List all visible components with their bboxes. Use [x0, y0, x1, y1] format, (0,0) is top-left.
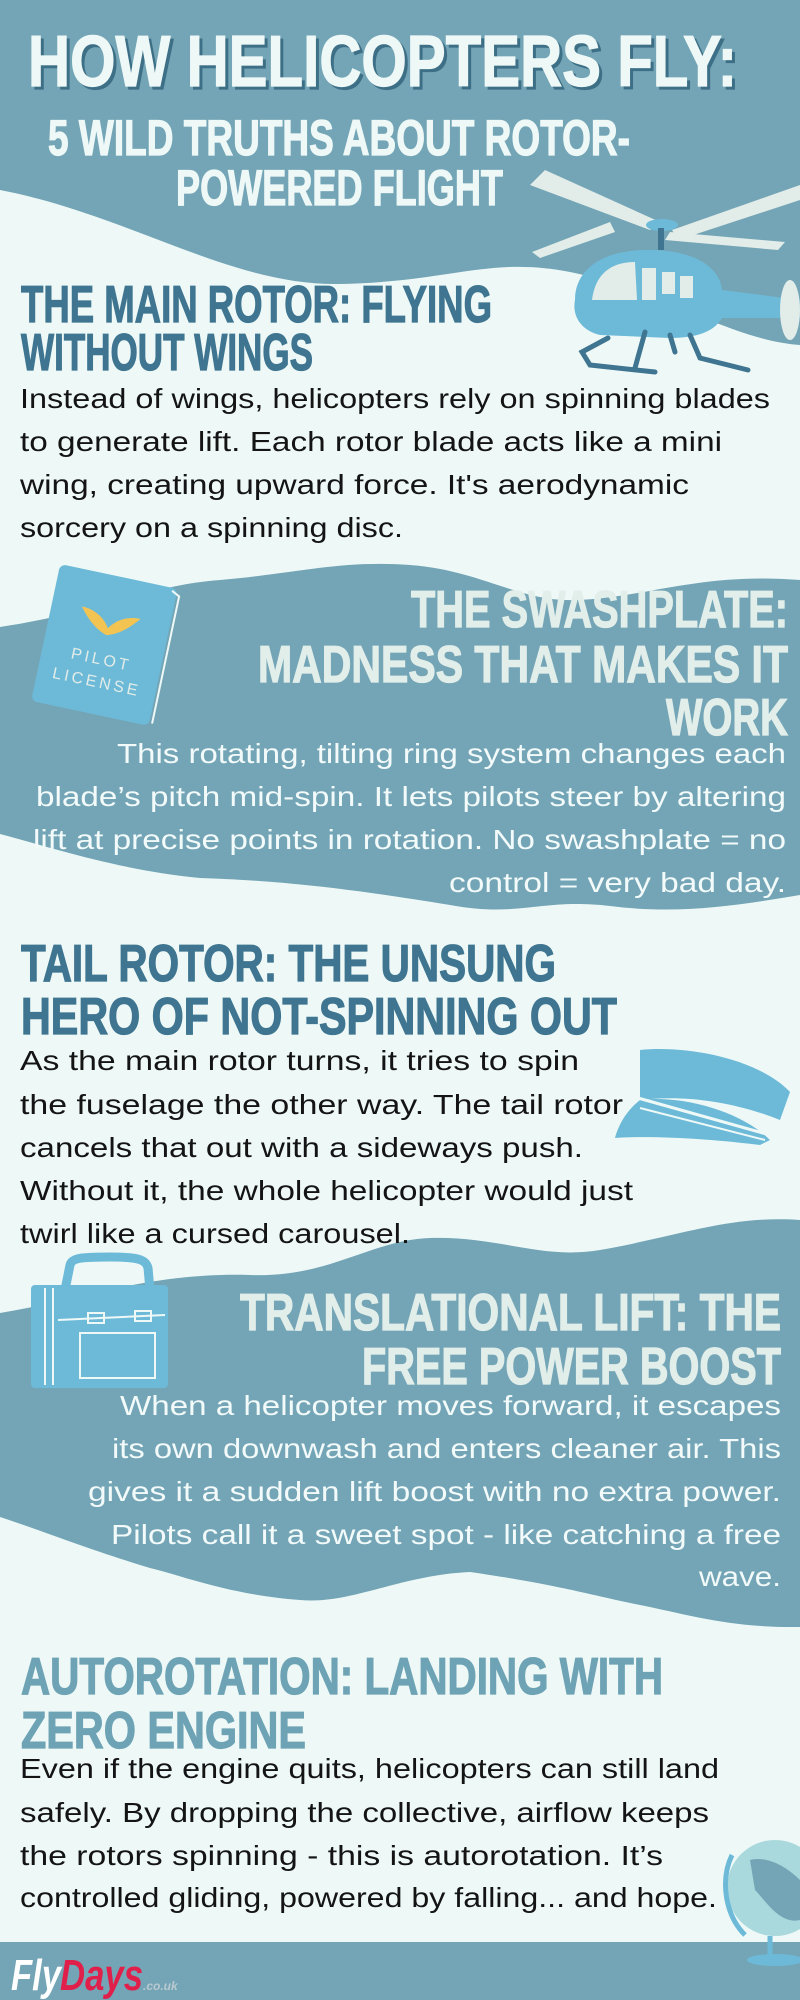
heading: tail rotor: [21, 935, 617, 1046]
text: swashplate body: [33, 738, 786, 898]
text: translational lift body: When a helicopter moves forward, it escapes: [120, 1390, 781, 1421]
logo: FlyDays: Days: [60, 1951, 143, 2000]
background wave: header: [0, 0, 800, 345]
text: main rotor body: [19, 383, 770, 543]
icon: globe: [726, 1840, 800, 1966]
subtitle: [48, 110, 630, 216]
heading: swashplate: [258, 581, 788, 747]
heading: main rotor: WITHOUT WINGS: [21, 324, 313, 382]
text: main rotor body: wing, creating upward force. It's aerodynamic: [19, 469, 689, 500]
logo: FlyDays: .co.uk: [143, 1979, 179, 1993]
text: main rotor body: sorcery on a spinning disc.: [20, 512, 403, 543]
subtitle: POWERED FLIGHT: [176, 160, 503, 216]
text: autorotation body: Even if the engine quits, helicopters can still land: [20, 1753, 719, 1784]
logo: FlyDays: [11, 1951, 179, 2000]
text: swashplate body: This rotating, tilting ring system changes each: [117, 738, 786, 769]
text: autorotation body: safely. By dropping the collective, airflow keeps: [20, 1797, 709, 1828]
text: tail rotor body: [20, 1045, 633, 1249]
text: tail rotor body: twirl like a cursed carousel.: [20, 1218, 410, 1249]
icon: pilot license book: [31, 564, 181, 727]
text: main rotor body: to generate lift. Each rotor blade acts like a mini: [20, 426, 722, 457]
icon: briefcase: [31, 1257, 168, 1388]
text: autorotation body: the rotors spinning - this is autorotation. It’s: [20, 1840, 663, 1871]
heading: main rotor: THE MAIN ROTOR: FLYING: [21, 276, 492, 334]
heading: autorotation: [21, 1648, 663, 1760]
text: translational lift body: Pilots call it a sweet spot - like catching a free: [111, 1519, 781, 1550]
text: translational lift body: gives it a sudden lift boost with no extra power.: [88, 1476, 781, 1507]
text: tail rotor body: cancels that out with a sideways push.: [20, 1132, 583, 1163]
icon: pilot cap: [615, 1049, 790, 1145]
text: translational lift body: its own downwash and enters cleaner air. This: [112, 1433, 781, 1464]
icon: helicopter: [530, 170, 800, 372]
text: tail rotor body: Without it, the whole helicopter would just: [20, 1175, 633, 1206]
text: translational lift body: wave.: [698, 1561, 781, 1592]
text: tail rotor body: As the main rotor turns, it tries to spin: [20, 1045, 579, 1076]
logo: FlyDays: Fly: [11, 1951, 63, 2000]
text: tail rotor body: the fuselage the other way. The tail rotor: [20, 1089, 623, 1120]
heading: tail rotor: HERO OF NOT-SPINNING OUT: [21, 988, 617, 1046]
text: autorotation body: [20, 1753, 719, 1913]
heading: autorotation: ZERO ENGINE: [21, 1702, 306, 1760]
background wave: swashplate band: [0, 564, 800, 910]
footer band: [0, 1942, 800, 2000]
heading: tail rotor: TAIL ROTOR: THE UNSUNG: [21, 935, 556, 993]
text: swashplate body: lift at precise points in rotation. No swashplate = no: [33, 824, 786, 855]
text: swashplate body: control = very bad day.: [449, 867, 786, 898]
text: translational lift body: [88, 1390, 781, 1592]
text: autorotation body: controlled gliding, powered by falling... and hope.: [20, 1882, 717, 1913]
icon: pilot license book: PILOT: [69, 645, 133, 675]
text: main rotor body: Instead of wings, helicopters rely on spinning blades: [20, 383, 770, 414]
background wave: translational band: [0, 1219, 800, 1627]
heading: translational lift: [240, 1284, 781, 1396]
heading: main rotor: [21, 276, 492, 382]
icon: pilot license book: LICENSE: [51, 665, 142, 700]
text: swashplate body: blade’s pitch mid-spin. It lets pilots steer by altering: [36, 781, 786, 812]
